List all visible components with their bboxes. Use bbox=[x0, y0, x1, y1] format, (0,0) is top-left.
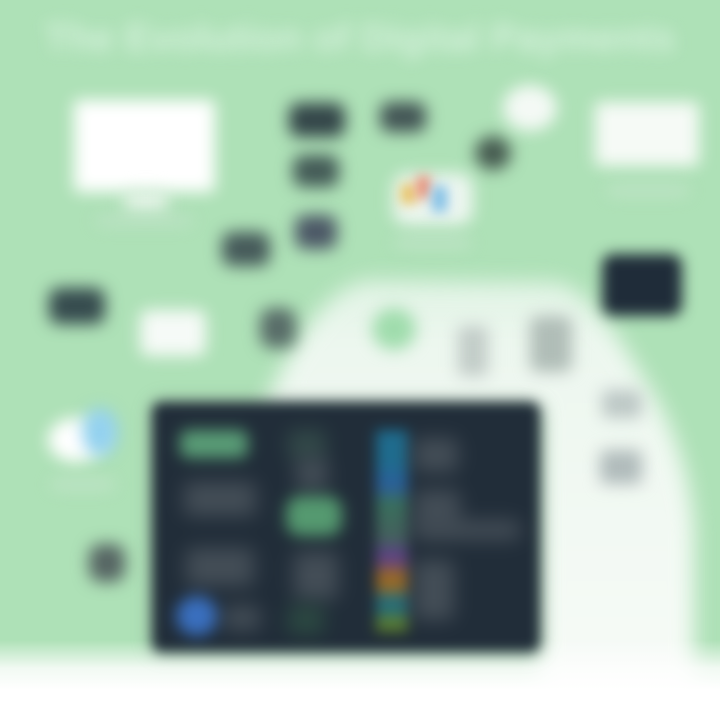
panel: large white card top left bbox=[64, 90, 224, 224]
icon: grey bar on road bbox=[458, 326, 488, 376]
column 3 text 4 bbox=[414, 560, 454, 620]
cloud blue part bbox=[82, 408, 118, 456]
panel: white card top right bbox=[586, 93, 708, 194]
icon: dark node 4 bbox=[222, 232, 270, 266]
column 3 text 3 bbox=[414, 520, 520, 540]
icon: dark circle node bbox=[475, 136, 511, 170]
cloud label bbox=[52, 480, 114, 489]
column 1 green badge bbox=[180, 430, 248, 458]
logo background bbox=[393, 173, 473, 225]
column 2 upper text bbox=[296, 458, 328, 490]
icon: colourful logo bbox=[384, 164, 482, 246]
card stand bbox=[125, 190, 167, 212]
card label bbox=[608, 186, 688, 195]
title: The Evolution of Digital Payments bbox=[45, 17, 675, 60]
column 1 blue circle bbox=[176, 596, 218, 636]
column 1 text row 2 bbox=[186, 548, 254, 586]
icon: dark node 6 left bbox=[49, 288, 105, 324]
icon: dark node 3 bbox=[380, 102, 426, 132]
icon: dark node 1 bbox=[289, 103, 345, 137]
icon: green circle on road bbox=[372, 308, 416, 350]
logo label bbox=[396, 238, 470, 247]
icon: dark node 5 bbox=[295, 215, 337, 249]
column 2 top text bbox=[288, 430, 326, 460]
card label bbox=[97, 216, 192, 225]
cloud white part bbox=[48, 418, 104, 462]
icon: dark node 2 bbox=[293, 155, 339, 187]
icon: white blob top right bbox=[503, 85, 557, 131]
panel: dark table bbox=[152, 402, 540, 652]
column 3 text 1 bbox=[414, 438, 458, 472]
icon: white card middle left bbox=[140, 310, 206, 356]
logo colour marks bbox=[401, 184, 416, 204]
colour strip bbox=[376, 430, 408, 632]
icon: dark node bottom left bbox=[89, 544, 125, 582]
icon: dark node 7 bbox=[260, 308, 296, 348]
icon: grey card right 1 bbox=[602, 390, 642, 418]
column 1 text row 3 bbox=[224, 606, 260, 630]
column 2 lower text bbox=[294, 552, 338, 600]
icon: grey card right 2 bbox=[600, 450, 642, 484]
icon: cloud bbox=[40, 402, 125, 488]
panel: dark top right screen bbox=[602, 254, 682, 316]
column 2 bottom text bbox=[288, 606, 324, 634]
card body bbox=[74, 100, 215, 192]
bottom white band bbox=[0, 640, 720, 720]
card body bbox=[595, 102, 699, 166]
column 1 text row 1 bbox=[184, 482, 256, 516]
icon: grey device on road bbox=[530, 316, 572, 372]
column 2 green badge bbox=[286, 496, 342, 536]
column 3 text 2 bbox=[414, 490, 460, 528]
